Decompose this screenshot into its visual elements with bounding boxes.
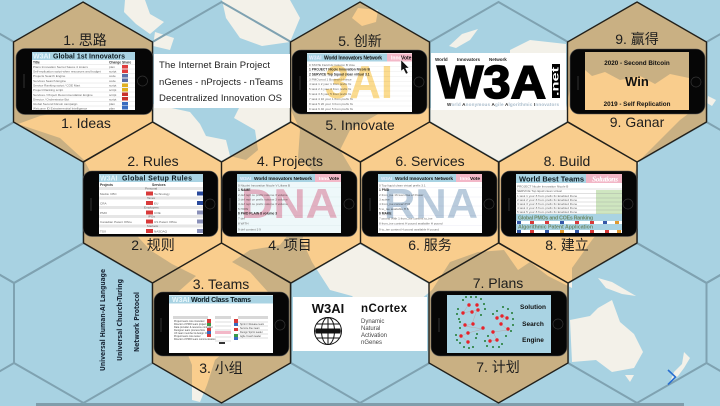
phone: 6 Services, RNA: Vote: [470, 176, 480, 182]
icon: globe with people: [314, 318, 342, 344]
phone: 4 Projects, DNA: 4 def repl ce prefix volume 3 volume: [238, 202, 288, 206]
phone: 5 Innovate, 3AI: Vote: [401, 56, 412, 62]
phone: 1 Ideas, Global 1st Innovators: Change: [109, 60, 121, 64]
phone: 4 Projects, DNA: 0 Nicolet Innovation Nicole V Lilians B: [238, 184, 290, 188]
phone: 1 Ideas, Global 1st Innovators: Director / Orchestrator Bot: [33, 98, 69, 102]
phone: 8 Build, World Best Teams: Global PMOs and COEs Ranking: [518, 216, 593, 222]
phone: 2 Rules, Global Setup Rules: PMO: [100, 211, 108, 215]
phone: 4 Projects, DNA: Inno: [319, 176, 329, 182]
phone: 2 Rules, Global Setup Rules: Markets: [147, 224, 158, 228]
phone: 2 Rules, Global Setup Rules: Taxes: [147, 196, 156, 200]
hex labels: 8. Build: [544, 153, 590, 169]
hex labels: 8. 建立: [545, 237, 589, 253]
panel: project description: Decentralized Innovation OS: [159, 93, 282, 104]
phone: 2 Rules, Global Setup Rules: EU: [154, 202, 158, 206]
phone: 8 Build, World Best Teams: Algorithmic Patent Application: [518, 224, 593, 230]
phone: 5 Innovate, 3AI: 6 task 3 8 your 5 from prefix fix: [309, 92, 352, 96]
panel: W3A.net logo: World Anonymous Agile Algorithmic Innovators: [447, 102, 559, 107]
panel: W3A.net logo: Innovators: [457, 57, 481, 62]
phone: 5 Innovate, 3AI: 3AI: [325, 56, 393, 108]
hex labels: 7. 计划: [476, 359, 520, 375]
phone: 5 Innovate, 3AI: 1 PROJECT Nicole Innovation Nicole B: [309, 68, 370, 72]
panel: W3AI nCortex: Dynamic: [361, 319, 384, 325]
phone: 7 Plans, Solution Search Engine network: Engine: [522, 337, 544, 344]
hex labels: 4. Projects: [257, 153, 323, 169]
hex labels: 3. 小组: [199, 360, 243, 376]
phone: 1 Ideas, Global 1st Innovators: Title: [33, 60, 40, 64]
phone: 4 Projects, DNA: World Innovators Network: [254, 176, 312, 182]
phone: 6 Services, RNA: 1 PMD: [379, 188, 390, 192]
phone: 5 Innovate, 3AI: 4 task 1 2 your 1 from prefix fix: [309, 82, 352, 86]
hex labels: 2. 规则: [131, 237, 175, 253]
phone: 8 Build, World Best Teams: SERVICE Top liquid clean virtual: [517, 189, 562, 193]
phone: 9 Ganar, Win: 2019 - Self Replication: [604, 101, 671, 108]
phone: 6 Services, RNA: 7 pound With 1 from_ise context to_ise: [379, 216, 433, 220]
phone: 4 Projects, DNA: [222, 171, 357, 236]
phone: 5 Innovate, 3AI: 5 task 2 4 your 3 from prefix fix: [309, 87, 352, 91]
phone: 9 Ganar, Win: [570, 49, 705, 114]
phone: 1 Ideas, Global 1st Innovators: code: [109, 74, 116, 78]
phone: 1 Ideas, Global 1st Innovators: Self-replication script when resources and budget: [33, 70, 101, 74]
phone: 4 Projects, DNA: 6 PAID PLAIN 8 volume 3: [238, 212, 277, 216]
phone: 2 Rules, Global Setup Rules: Personal: [145, 186, 158, 190]
phone: 1 Ideas, Global 1st Innovators: Global Second bitcoin campaign: [33, 102, 78, 106]
phone: 2 Rules, Global Setup Rules: Canadian Patent Office: [100, 220, 132, 224]
phone: 2 Rules, Global Setup Rules: Global Setup Rules: [122, 176, 192, 182]
phone: 4 Projects, DNA: 2 def repl ce prefix volume 3 volume: [238, 193, 288, 197]
phone: 8 Build, World Best Teams: 2 task 2 your 8 from prefix fix Enabled Done: [517, 198, 577, 202]
hex labels: 1. Ideas: [61, 115, 111, 131]
phone: 8 Build, World Best Teams: 3 task 3 your 8 from prefix fix Enabled Done: [517, 202, 577, 206]
phone: 1 Ideas, Global 1st Innovators: [16, 48, 153, 114]
phone: 1 Ideas, Global 1st Innovators: plan: [109, 106, 115, 110]
panel: W3AI nCortex: Activation: [361, 333, 387, 339]
phone: 7 Plans, Solution Search Engine network: [431, 291, 567, 356]
phone: 6 Services, RNA: Inno: [460, 176, 470, 182]
phone: 1 Ideas, Global 1st Innovators: Project Ranking script: [33, 88, 63, 92]
phone: 8 Build, World Best Teams: World Best Teams: [519, 174, 584, 184]
phone: 5 Innovate, 3AI: [292, 50, 427, 114]
phone: 5 Innovate, 3AI: Inno: [391, 56, 402, 62]
phone: 3 Teams, World Class Teams: Director of PMO team project: [174, 323, 207, 326]
panel: W3AI nCortex: nCortex: [361, 303, 408, 315]
icon: mouse cursor: [401, 60, 409, 74]
hex labels: 9. Ganar: [610, 114, 665, 130]
phone: 9 Ganar, Win: Win: [625, 74, 649, 89]
phone: 2 Rules, Global Setup Rules: Media: CBC: [100, 192, 117, 196]
phone: 6 Services, RNA: RNA: [384, 180, 478, 227]
phone: 4 Projects, DNA: 5 HOW: [238, 207, 248, 211]
phone: 4 Projects, DNA: 8 WITH: [238, 222, 248, 226]
vertical text: protocol names: Universal Church-Turing: [115, 279, 124, 361]
phone: 3 Teams, World Class Teams: Design Sprint leader: [240, 331, 263, 334]
hex labels: 6. Services: [395, 153, 465, 169]
panel: W3A.net logo: Network: [489, 57, 507, 62]
phone: 6 Services, RNA: 4 from_ise convert H 6: [379, 202, 410, 206]
phone: 8 Build, World Best Teams: [501, 171, 637, 236]
phone: 7 Plans, Solution Search Engine network: Search: [522, 321, 544, 328]
phone: 5 Innovate, 3AI: 3 PMO prod 1 Boolean H since: [309, 78, 352, 82]
phone: 7 Plans, Solution Search Engine network: Solution: [520, 304, 546, 311]
phone: 6 Services, RNA: 0 Top liquid clean virtual prefix 3.1: [379, 184, 426, 188]
hex labels: 7. Plans: [473, 275, 523, 291]
phone: 3 Teams, World Class Teams: Project team core innovator: [174, 320, 205, 323]
phone: 3 Teams, World Class Teams: Director of PMO team communication: [174, 338, 216, 341]
hex labels: 2. Rules: [127, 153, 179, 169]
phone: 6 Services, RNA: [362, 171, 497, 236]
panel: project description: The Internet Brain Project: [159, 60, 270, 71]
phone: 3 Teams, World Class Teams: Project team core tester: [174, 335, 201, 338]
hex labels: 1. 思路: [63, 32, 107, 48]
phone: 6 Services, RNA: W3AI: [381, 176, 392, 181]
phone: 1 Ideas, Global 1st Innovators: script: [109, 84, 117, 88]
phone: 3 Teams, World Class Teams: Data provider & resource controller: [174, 326, 213, 329]
phone: 2 Rules, Global Setup Rules: Services: [152, 183, 166, 187]
phone: 1 Ideas, Global 1st Innovators: Services Search Engine: [33, 79, 66, 83]
panel: W3AI nCortex: Natural: [361, 326, 380, 332]
phone: 1 Ideas, Global 1st Innovators: script: [109, 88, 117, 92]
phone: 2 Rules, Global Setup Rules: COE: [154, 211, 161, 215]
vertical text: protocol names: Universal Human-AI Language: [98, 269, 107, 371]
phone: 3 Teams, World Class Teams: Sprint / Release team: [240, 323, 264, 326]
phone: 4 Projects, DNA: W3AI: [240, 176, 251, 181]
panel: W3AI nCortex: nGenes: [361, 340, 382, 346]
phone: 5 Innovate, 3AI: W3AI: [309, 56, 322, 62]
phone: 2 Rules, Global Setup Rules: NASDAQ: [154, 230, 168, 234]
phone: 3 Teams, World Class Teams: World Class Teams: [191, 297, 251, 304]
phone: 2 Rules, Global Setup Rules: W3AI: [100, 176, 118, 182]
phone: 4 Projects, DNA: 3 def repl ce prefix volume 3 volume: [238, 198, 288, 202]
phone: 1 Ideas, Global 1st Innovators: script: [109, 70, 117, 74]
phone: 8 Build, World Best Teams: PROJECT Nicole Innovation Nicole B: [517, 184, 568, 188]
phone: 6 Services, RNA: 9 to_ise context H pound available H pound: [379, 228, 439, 232]
phone: 2 Rules, Global Setup Rules: Employers: [144, 206, 159, 210]
phone: 4 Projects, DNA: Vote: [329, 176, 339, 182]
phone: 6 Services, RNA: 5 to_ise available H 6: [379, 207, 409, 211]
phone: 2 Rules, Global Setup Rules: IPOs: [148, 214, 155, 218]
phone: 5 Innovate, 3AI: 9 task 6 40 your 5 from prefix fix: [309, 107, 353, 111]
panel: W3A.net logo: [431, 53, 566, 110]
phone: 6 Services, RNA: 2 from_ise 16 lean rise of Power: [379, 193, 423, 197]
phone: 1 Ideas, Global 1st Innovators: script: [109, 98, 117, 102]
phone: 3 Teams, World Class Teams: UX team member & design COE: [174, 332, 210, 335]
hex labels: 5. Innovate: [325, 117, 395, 133]
icon: next chevron arrow: [668, 370, 676, 384]
phone: 1 Ideas, Global 1st Innovators: Welcome ID Extraterrestrial Intelligence: [33, 106, 88, 110]
phone: 2 Rules, Global Setup Rules: Technology: [154, 192, 170, 196]
phone: 8 Build, World Best Teams: 5 task 5 your 8 from prefix fix Enabled Done: [517, 210, 577, 214]
phone: 3 Teams, World Class Teams: W3AI: [172, 297, 190, 304]
phone: 1 Ideas, Global 1st Innovators: Share: [122, 60, 131, 64]
phone: 1 Ideas, Global 1st Innovators: W3AI: [33, 54, 51, 60]
phone: 5 Innovate, 3AI: 2 SERVICE Top Squad clean virtual 3.1: [309, 72, 370, 76]
phone: 4 Projects, DNA: 7 def: [238, 216, 245, 220]
panel: W3A.net logo: .net: [550, 66, 562, 96]
phone: 6 Services, RNA: 8 from_ise context H pound available H pound: [379, 222, 443, 226]
phone: 1 Ideas, Global 1st Innovators: code: [109, 79, 116, 83]
chart: neural network dots: [455, 296, 514, 349]
phone: 6 Services, RNA: 6 MAKE: [379, 212, 392, 216]
phone: 3 Teams, World Class Teams: Designer team process flow: [174, 329, 205, 332]
phone: 1 Ideas, Global 1st Innovators: Service Ranking script / COE Mart: [33, 84, 80, 88]
panel: W3A.net logo: W3A: [437, 56, 546, 108]
phone: 1 Ideas, Global 1st Innovators: Projects Search Engine: [33, 74, 66, 78]
panel: W3A.net logo: World: [435, 57, 448, 62]
hex labels: 6. 服务: [408, 237, 452, 253]
phone: 1 Ideas, Global 1st Innovators: Global 1st Innovators: [53, 54, 125, 60]
panel: W3AI nCortex: [293, 297, 427, 351]
phone: 2 Rules, Global Setup Rules: Projects: [100, 183, 113, 187]
phone: 4 Projects, DNA: DNA: [241, 180, 338, 227]
phone: 5 Innovate, 3AI: 7 task 4 10 your 1 from prefix fix: [309, 97, 353, 101]
panel: W3AI nCortex: W3AI: [312, 301, 344, 316]
phone: 9 Ganar, Win: 2020 - Second Bitcoin: [604, 60, 670, 67]
phone: 3 Teams, World Class Teams: Agile Coach leader: [240, 335, 261, 338]
panel: project description: [154, 54, 290, 108]
phone: 2 Rules, Global Setup Rules: CRA: [100, 202, 107, 206]
vertical text: protocol names: Network Protocol: [132, 292, 141, 352]
phone: 3 Teams, World Class Teams: [154, 292, 289, 356]
hex labels: 5. 创新: [338, 33, 382, 49]
vertical text: protocol names: [98, 269, 141, 371]
phone: 2 Rules, Global Setup Rules: TSX: [100, 230, 106, 234]
phone: 6 Services, RNA: World Innovators Network: [395, 176, 453, 182]
panel: project description: nGenes - nProjects - nTeams: [159, 77, 283, 88]
phone: 1 Ideas, Global 1st Innovators: script: [109, 93, 117, 97]
phone: 4 Projects, DNA: 9 def context 3 9: [238, 228, 261, 232]
phone: 8 Build, World Best Teams: Solutions: [592, 174, 618, 184]
hex labels: 3. Teams: [193, 276, 249, 292]
phone: 5 Innovate, 3AI: 8 task 5 20 your 3 from prefix fix: [309, 102, 353, 106]
phone: 6 Services, RNA: 3 active: [379, 198, 390, 202]
phone: 2 Rules, Global Setup Rules: US Patent Office: [154, 220, 177, 224]
phone: 8 Build, World Best Teams: 4 task 4 your 8 from prefix fix Enabled Done: [517, 206, 577, 210]
phone: 1 Ideas, Global 1st Innovators: Services / Project Recommendation Engine: [33, 93, 93, 97]
hex labels: 9. 赢得: [615, 31, 659, 47]
phone: 1 Ideas, Global 1st Innovators: plan: [109, 65, 115, 69]
hex labels: 4. 项目: [268, 237, 312, 253]
phone: 2 Rules, Global Setup Rules: [83, 171, 218, 236]
phone: 8 Build, World Best Teams: 1 task 1 your 8 from prefix fix Enabled Done: [517, 194, 577, 198]
phone: 4 Projects, DNA: 1 NAME: [238, 188, 251, 192]
phone: 5 Innovate, 3AI: 0 STATE Field ldc Column B Vote: [309, 63, 355, 67]
phone: 5 Innovate, 3AI: World Innovators Network: [324, 56, 382, 62]
phone: 3 Teams, World Class Teams: Service Dev team: [240, 327, 260, 330]
phone: 1 Ideas, Global 1st Innovators: plan: [109, 102, 115, 106]
phone: 1 Ideas, Global 1st Innovators: Plans Innovation Secret Sauce 4 Listers: [33, 65, 88, 69]
hex labels: [61, 31, 665, 376]
